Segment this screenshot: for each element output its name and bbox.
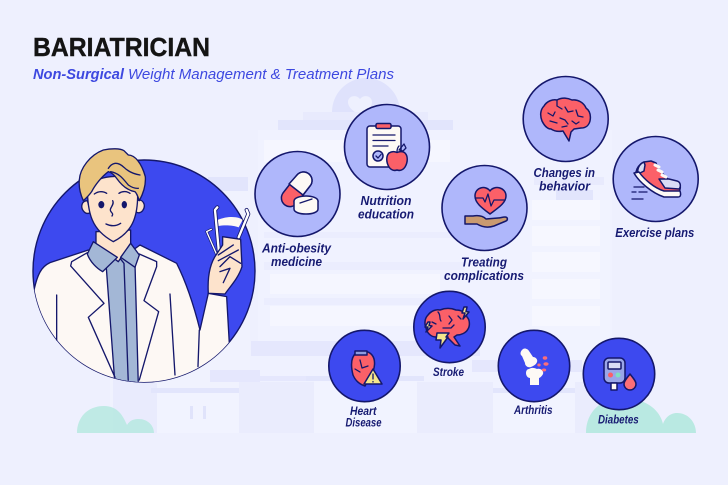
panel: arthritis: [498, 330, 570, 417]
title: BARIATRICIAN: [33, 32, 210, 62]
icon: glucose meter and blood drop: [604, 358, 636, 390]
label line 2: Disease: [346, 418, 382, 430]
neck: [96, 230, 131, 262]
label: Anti-obesity: [261, 240, 332, 256]
panel: treating complications: [442, 166, 527, 283]
panel: anti-obesity medicine: [255, 152, 340, 269]
icon: running shoe: [632, 161, 681, 199]
circle: [329, 330, 400, 402]
circle: [613, 136, 698, 222]
skinfold caliper: [207, 207, 248, 258]
label: Diabetes: [598, 414, 639, 426]
icon: pill capsule and tablet: [281, 172, 318, 214]
label: Heart: [350, 406, 378, 418]
left bush: [77, 406, 154, 433]
icon: clipboard and apple: [367, 124, 407, 170]
blue circle backdrop: [33, 160, 255, 382]
icon: brain: [541, 98, 590, 141]
label: Exercise plans: [615, 225, 694, 240]
circle: [344, 104, 430, 190]
subtitle: Non-Surgical: [33, 66, 125, 83]
shirt and tie: [106, 255, 138, 385]
panel: stroke: [414, 291, 485, 379]
label: Stroke: [433, 367, 465, 379]
panel: nutrition education: [344, 104, 430, 222]
panel: diabetes: [583, 338, 655, 426]
label: Changes in: [534, 165, 595, 180]
circle: [583, 338, 655, 410]
doctor portrait: [33, 149, 255, 397]
panel: changes in behavior: [523, 76, 608, 194]
white lab coat: [33, 245, 229, 397]
label line 2: education: [358, 206, 414, 222]
label: Treating: [461, 254, 507, 270]
hand: [208, 237, 242, 294]
icon: heart in hand: [465, 188, 507, 227]
circle: [414, 291, 485, 363]
label: Nutrition: [360, 193, 412, 208]
circle: [442, 166, 527, 250]
circle: [498, 330, 570, 402]
icon: heart with warning: [351, 351, 382, 386]
eyebrows, eyes, nose, mouth: [94, 192, 130, 226]
doctor illustration: [33, 149, 248, 397]
coat lapels: [57, 253, 199, 380]
panel: heart disease: [329, 330, 400, 430]
icon: joint bone: [520, 348, 549, 385]
circle: [255, 152, 340, 236]
label line 2: complications: [444, 268, 524, 283]
circle: [523, 76, 608, 162]
face: [87, 176, 138, 242]
panel: exercise plans: [613, 136, 698, 240]
shirt collar: [87, 242, 139, 272]
icon: brain with lightning: [425, 307, 469, 348]
label line 2: medicine: [271, 254, 322, 269]
label: Arthritis: [513, 405, 552, 417]
ears: [82, 200, 144, 213]
subtitle: Weight Management & Treatment Plans: [128, 66, 394, 83]
label line 2: behavior: [539, 178, 591, 194]
background hospital building: [110, 78, 612, 433]
right bush: [586, 398, 696, 433]
hair: [79, 149, 145, 201]
